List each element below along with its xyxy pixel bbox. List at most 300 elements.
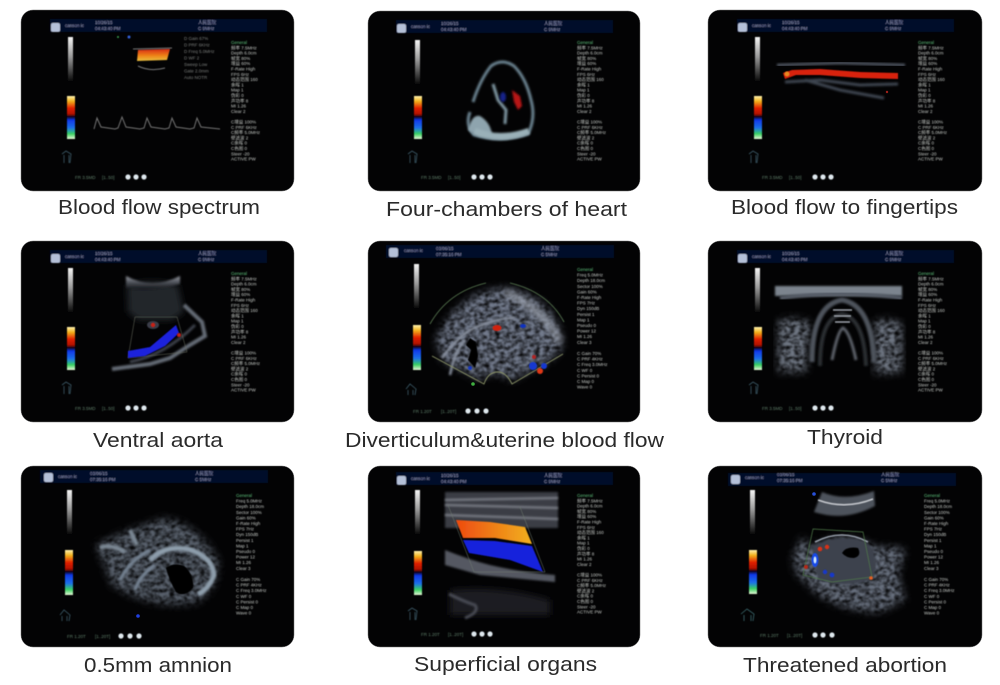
settings list: C增益 100% (577, 118, 602, 125)
screen (21, 466, 294, 647)
thyroid scan (775, 286, 902, 374)
screen (368, 241, 640, 422)
caption: amnion: 0.5mm amnion (84, 655, 232, 677)
footer status and dots: [1..50] (448, 175, 461, 180)
settings list: 帧宽 80% (231, 286, 250, 293)
settings list: F-Rate High (577, 520, 602, 524)
spectrum parameters: Auto NOTR (184, 75, 208, 80)
settings list: 伪彩 0 (918, 92, 931, 99)
screen (708, 466, 982, 647)
footer status and dots: FR 1.20T (413, 409, 432, 414)
settings list: F-Rate High (918, 298, 943, 302)
header bar (40, 470, 268, 483)
header bar: 03/06/15 (436, 246, 454, 251)
settings list: Depth 6.0cm (577, 504, 603, 509)
settings list: 动态范围 160 (918, 307, 945, 314)
settings list: C PRF 6KHz (577, 125, 604, 130)
header bar (386, 245, 614, 258)
settings list: C PRF 6KHz (918, 356, 945, 361)
header bar: C 9MHz (198, 257, 215, 262)
panel: blood flow spectrum (21, 10, 294, 191)
settings list: C色图 0 (918, 145, 934, 152)
footer status and dots: [1..50] (789, 406, 802, 411)
footer status and dots: [1..20T] (95, 634, 110, 639)
settings list: 声功率 8 (231, 328, 249, 335)
probe icon (406, 384, 416, 395)
header bar: 07:35:16 PM (90, 477, 116, 482)
header bar (728, 471, 956, 486)
header bar (737, 19, 954, 32)
settings list: Power 12 (924, 555, 944, 560)
settings list: 余晖 1 (918, 312, 931, 319)
settings list: MI 1.26 (236, 560, 252, 565)
settings list: 动态范围 160 (231, 76, 258, 83)
screen (708, 241, 982, 422)
settings list: Persist 1 (577, 312, 595, 317)
header bar (396, 472, 613, 485)
caption: diverticulum and uterine blood flow: Diverticulum&uterine blood flow (345, 430, 665, 452)
screen (368, 466, 640, 647)
settings list: Power 12 (236, 555, 256, 560)
settings list: 频率 7.5MHz (231, 44, 258, 51)
screen (368, 11, 640, 191)
settings list: C Persist 0 (236, 599, 259, 604)
settings list: F-Rate High (918, 66, 943, 72)
settings list: Depth 18.0cm (236, 504, 264, 509)
settings list: Map 1 (231, 88, 244, 93)
settings list: 余晖 1 (577, 534, 590, 541)
settings list: 增益 60% (918, 60, 937, 67)
settings list: C Gain 70% (924, 577, 948, 582)
probe icon (408, 151, 417, 163)
panel: diverticulum and uterine blood flow (368, 241, 640, 422)
settings list: Clear 2 (577, 109, 592, 114)
header bar: 04:43:40 PM (441, 27, 467, 32)
header bar: C 9MHz (198, 26, 215, 31)
settings list: C余晖 0 (231, 140, 247, 147)
settings list: C WF 0 (236, 594, 252, 599)
settings list: Persist 1 (924, 538, 942, 543)
header bar: 人民医院 (885, 19, 903, 26)
header bar: 04:43:40 PM (782, 257, 808, 262)
settings list: 壁滤波 2 (577, 587, 595, 594)
probe icon (60, 610, 70, 621)
settings list: F-Rate High (231, 298, 256, 302)
settings list: C PRF 4KHz (577, 357, 604, 362)
settings list: C PRF 6KHz (231, 125, 258, 130)
scale bars (414, 40, 422, 139)
settings list: C Freq 3.0MHz (236, 588, 267, 593)
settings list: Clear 2 (918, 109, 933, 114)
spectrum waveform (94, 117, 220, 129)
scale bars (67, 268, 75, 370)
settings list: C增益 100% (231, 118, 256, 125)
header bar: 人民医院 (544, 472, 562, 479)
settings list: 增益 60% (577, 513, 596, 520)
settings list: ACTIVE PW (231, 157, 257, 162)
settings list: C余晖 0 (918, 371, 934, 378)
footer status and dots: [1..20T] (448, 632, 463, 637)
settings list: Map 1 (231, 319, 244, 324)
caption: blood flow spectrum: Blood flow spectrum (58, 197, 260, 219)
header bar (396, 20, 613, 33)
header bar: C 9MHz (885, 26, 902, 31)
header bar: 10/26/15 (95, 251, 113, 256)
settings list: C增益 100% (577, 572, 602, 578)
settings list: Depth 6.0cm (231, 282, 257, 287)
footer status and dots: FR 3.5MD (75, 175, 96, 180)
footer status and dots: [1..20T] (441, 409, 456, 414)
settings list: C频率 5.0MHz (577, 129, 607, 136)
probe icon (62, 151, 71, 163)
footer status and dots (75, 174, 147, 180)
settings list: C PRF 6KHz (577, 578, 604, 583)
settings list: C Map 0 (236, 605, 254, 610)
settings list: General (231, 271, 247, 276)
header bar: canson ic (411, 476, 431, 481)
settings list: 动态范围 160 (231, 307, 258, 314)
settings list: F-Rate High (236, 521, 261, 526)
settings list: C频率 5.0MHz (918, 360, 948, 367)
settings list: C色图 0 (231, 145, 247, 152)
spectrum parameters: Gate 2.0mm (184, 68, 209, 74)
settings list: Map 1 (577, 541, 590, 546)
settings list: C频率 5.0MHz (577, 582, 607, 589)
settings list: C Map 0 (924, 605, 942, 610)
settings list: Pseudo 0 (236, 549, 256, 554)
settings list: FPS 6Hz (918, 303, 937, 308)
settings list: 壁滤波 2 (231, 134, 249, 141)
settings list: FPS 6Hz (918, 72, 937, 77)
settings list: C Persist 0 (924, 599, 947, 604)
settings list: Wave 0 (924, 611, 940, 616)
header bar: 04:43:40 PM (441, 479, 467, 484)
settings list: Clear 3 (577, 340, 592, 345)
header bar: 人民医院 (881, 471, 899, 478)
settings list: Clear 2 (918, 340, 933, 345)
settings list: Steer -20 (231, 151, 250, 156)
settings list: C Freq 3.0MHz (924, 588, 955, 593)
settings list: C Freq 3.0MHz (577, 362, 608, 367)
settings list: C WF 0 (924, 594, 940, 599)
header bar: 人民医院 (544, 20, 562, 27)
header bar: canson ic (404, 248, 424, 253)
settings list: Map 1 (924, 543, 937, 548)
header bar: C 9MHz (544, 27, 561, 32)
settings list: 余晖 1 (231, 312, 244, 319)
uterine scan (430, 283, 564, 386)
settings list: General (924, 493, 940, 498)
probe icon (741, 609, 754, 621)
probe icon (62, 382, 71, 394)
settings list: 帧宽 80% (231, 55, 250, 62)
settings list: Dyn 150dB (577, 306, 599, 311)
header bar: 04:43:40 PM (95, 26, 121, 31)
header bar: C 5MHz (881, 478, 898, 483)
header bar: 人民医院 (541, 245, 559, 252)
spectrum parameters: D WF 2 (184, 56, 200, 60)
settings list: Clear 2 (231, 340, 246, 345)
header bar: canson ic (58, 474, 78, 479)
settings list: 增益 60% (231, 291, 250, 298)
settings list: FPS 7Hz (577, 301, 596, 306)
settings list: FPS 7Hz (924, 527, 943, 532)
settings list: F-Rate High (924, 521, 949, 526)
settings list: F-Rate High (577, 66, 602, 72)
settings list: Dyn 150dB (924, 532, 946, 537)
settings list: C色图 0 (577, 145, 593, 152)
probe icon (749, 151, 758, 163)
settings list: 声功率 8 (577, 97, 595, 104)
settings list: Sector 100% (924, 510, 950, 515)
scale bars (754, 268, 762, 370)
settings list: MI 1.26 (918, 104, 934, 109)
settings list: Freq 5.0MHz (924, 499, 951, 504)
settings list: General (918, 40, 934, 45)
spectrum parameters: Sweep Low (184, 62, 208, 67)
settings list: C Gain 70% (236, 577, 260, 582)
header bar: canson ic (411, 24, 431, 29)
header bar: 07:35:16 PM (777, 478, 803, 483)
settings list: FPS 6Hz (231, 303, 250, 308)
settings list: C色图 0 (918, 376, 934, 383)
settings list: MI 1.26 (231, 335, 247, 340)
panel: blood flow to fingertips (708, 10, 982, 191)
header bar (50, 250, 267, 263)
aorta scan (112, 276, 205, 369)
settings list: Depth 6.0cm (577, 51, 603, 56)
footer status and dots: [1..20T] (787, 633, 802, 638)
settings list: 伪彩 0 (577, 545, 590, 552)
footer status and dots (67, 633, 142, 639)
settings list: 动态范围 160 (918, 76, 945, 83)
settings list: 帧宽 80% (918, 286, 937, 293)
settings list: C余晖 0 (918, 140, 934, 147)
settings list: Freq 5.0MHz (577, 273, 604, 278)
caption: thyroid: Thyroid (807, 427, 883, 449)
settings list: ACTIVE PW (918, 157, 944, 162)
panel: amnion (21, 466, 294, 647)
settings list: Map 1 (918, 88, 931, 93)
panel: thyroid (708, 241, 982, 422)
settings list: ACTIVE PW (231, 388, 257, 393)
header bar: 04:43:40 PM (95, 257, 121, 262)
settings list: 声功率 8 (577, 550, 595, 557)
spectrum parameters: D Freq 5.0MHz (184, 49, 215, 54)
footer status and dots (762, 174, 834, 180)
settings list: Sector 100% (236, 510, 262, 515)
screen (21, 241, 294, 422)
footer status and dots: [1..50] (789, 175, 802, 180)
settings list: C余晖 0 (231, 371, 247, 378)
settings list: 帧宽 80% (577, 55, 596, 62)
settings list: Power 12 (577, 329, 597, 334)
settings list: 频率 7.5MHz (918, 275, 945, 282)
footer status and dots: FR 1.20T (67, 634, 86, 639)
settings list: General (577, 40, 593, 45)
settings list: 增益 60% (918, 291, 937, 298)
settings list: 频率 7.5MHz (918, 44, 945, 51)
settings list: F-Rate High (577, 295, 602, 300)
scale bars (754, 37, 762, 139)
settings list: MI 1.26 (231, 104, 247, 109)
header bar: 10/26/15 (782, 251, 800, 256)
footer status and dots (413, 408, 489, 414)
settings list: 帧宽 80% (918, 55, 937, 62)
settings list: Clear 3 (924, 566, 939, 571)
settings list: 余晖 1 (918, 81, 931, 88)
settings list: MI 1.26 (924, 560, 940, 565)
header bar: C 9MHz (544, 479, 561, 484)
settings list: C PRF 6KHz (231, 356, 258, 361)
settings list: C增益 100% (231, 350, 256, 356)
settings list: Depth 6.0cm (918, 282, 944, 287)
settings list: C余晖 0 (577, 140, 593, 147)
header bar: 03/06/15 (90, 471, 108, 476)
scale bars (749, 490, 757, 594)
panel: superficial organs (368, 466, 640, 647)
header bar: 10/26/15 (95, 20, 113, 25)
screen (21, 10, 294, 191)
settings list: 动态范围 160 (577, 76, 604, 83)
footer status and dots: FR 1.20T (760, 633, 779, 638)
settings list: Dyn 150dB (236, 532, 258, 537)
header bar: 10/26/15 (441, 473, 459, 478)
settings list: Persist 1 (236, 538, 254, 543)
footer status and dots: FR 3.5MD (421, 175, 442, 180)
scale bars (67, 37, 75, 139)
settings list: General (577, 493, 593, 498)
settings list: Depth 18.0cm (924, 504, 952, 509)
settings list: 壁滤波 2 (231, 365, 249, 372)
fingertip scan (777, 63, 905, 98)
settings list: Steer -20 (231, 382, 250, 387)
settings list: 伪彩 0 (231, 323, 244, 330)
settings list: MI 1.26 (918, 335, 934, 340)
settings list: 帧宽 80% (577, 508, 596, 515)
header bar: 04:43:40 PM (782, 26, 808, 31)
settings list: Wave 0 (577, 385, 593, 390)
header bar (737, 250, 954, 263)
settings list: 伪彩 0 (577, 92, 590, 99)
footer status and dots: FR 1.20T (421, 632, 440, 637)
settings list: Clear 2 (231, 109, 246, 114)
header bar: canson ic (745, 475, 765, 480)
settings list: Gain 60% (924, 515, 944, 520)
header bar: canson ic (65, 254, 85, 259)
header bar: C 9MHz (885, 257, 902, 262)
header bar: 07:35:16 PM (436, 252, 462, 257)
settings list: 壁滤波 2 (577, 134, 595, 141)
settings list: ACTIVE PW (577, 610, 603, 615)
settings list: 声功率 8 (918, 328, 936, 335)
settings list: 余晖 1 (577, 81, 590, 88)
footer status and dots: [1..50] (102, 406, 115, 411)
footer status and dots (760, 632, 835, 638)
settings list: C余晖 0 (577, 593, 593, 600)
settings list: Gain 60% (577, 289, 597, 294)
caption: blood flow to fingertips: Blood flow to fingertips (731, 197, 958, 219)
settings list: Clear 3 (236, 566, 251, 571)
settings list: Steer -20 (918, 151, 937, 156)
settings list: C增益 100% (918, 118, 943, 125)
settings list: General (577, 267, 593, 272)
settings list: 余晖 1 (231, 81, 244, 88)
settings list: Sector 100% (577, 284, 603, 289)
settings list: Steer -20 (577, 604, 596, 609)
settings list: C PRF 6KHz (918, 125, 945, 130)
settings list: MI 1.26 (577, 104, 593, 109)
settings list: Depth 6.0cm (918, 51, 944, 56)
settings list: Freq 5.0MHz (236, 499, 263, 504)
settings list: 频率 7.5MHz (577, 497, 604, 504)
settings list: Wave 0 (236, 611, 252, 616)
settings list: ACTIVE PW (918, 388, 944, 393)
footer status and dots: FR 3.5MD (762, 175, 783, 180)
settings list: Pseudo 0 (924, 549, 944, 554)
settings list: Clear 2 (577, 562, 592, 567)
settings list: C Persist 0 (577, 373, 600, 378)
header bar: canson ic (752, 23, 772, 28)
settings list: 频率 7.5MHz (231, 275, 258, 282)
settings list: C频率 5.0MHz (918, 129, 948, 136)
header bar: canson ic (752, 254, 772, 259)
footer status and dots (762, 405, 834, 411)
settings list: FPS 6Hz (577, 525, 596, 530)
caption: four chambers of heart: Four-chambers of heart (386, 199, 628, 221)
settings list: Map 1 (236, 543, 249, 548)
probe icon (408, 608, 417, 620)
header bar: C 5MHz (195, 477, 212, 482)
spectrum parameters: D Gain 67% (184, 36, 208, 41)
settings list: MI 1.26 (577, 334, 593, 339)
header bar: 10/26/15 (441, 21, 459, 26)
settings list: 增益 60% (231, 60, 250, 67)
heart scan (468, 62, 533, 140)
settings list: 声功率 8 (918, 97, 936, 104)
settings list: FPS 6Hz (577, 72, 596, 77)
settings list: MI 1.26 (577, 557, 593, 562)
footer status and dots (421, 174, 493, 180)
settings list: General (236, 493, 252, 498)
settings list: Gain 60% (236, 515, 256, 520)
settings list: C频率 5.0MHz (231, 360, 261, 367)
caption: threatened abortion: Threatened abortion (743, 655, 947, 677)
settings list: Steer -20 (918, 382, 937, 387)
settings list: C色图 0 (577, 598, 593, 605)
settings list: 频率 7.5MHz (577, 44, 604, 51)
settings list: General (231, 40, 247, 45)
vessel scan (445, 492, 558, 618)
settings list: F-Rate High (231, 66, 256, 72)
amnion scan (96, 518, 218, 618)
footer status and dots (421, 631, 493, 637)
header bar: 03/06/15 (777, 472, 795, 477)
settings list: C WF 0 (577, 368, 593, 373)
settings list: C PRF 4KHz (236, 583, 263, 588)
scale bars (65, 490, 73, 595)
settings list: 动态范围 160 (577, 529, 604, 536)
settings list: C Gain 70% (577, 351, 601, 356)
settings list: 伪彩 0 (918, 323, 931, 330)
settings list: C增益 100% (918, 350, 943, 356)
footer status and dots: FR 3.5MD (75, 406, 96, 411)
settings list: 增益 60% (577, 60, 596, 67)
settings list: C PRF 4KHz (924, 583, 951, 588)
header bar (50, 19, 267, 32)
caption: superficial organs: Superficial organs (414, 654, 597, 676)
flow box (117, 36, 172, 70)
